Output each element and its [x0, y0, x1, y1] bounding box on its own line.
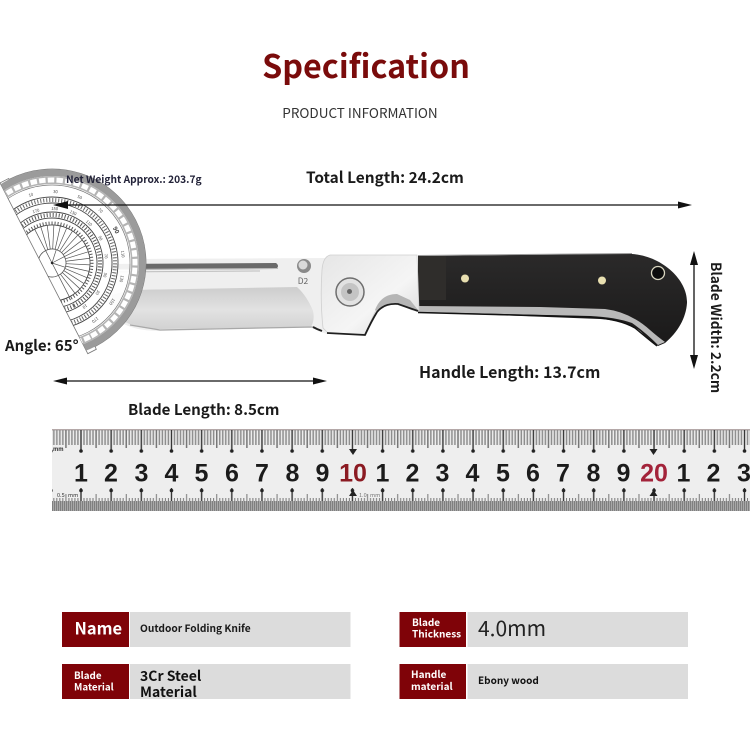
spec row: blade thickness — [400, 612, 688, 647]
ruler unit labels: mm — [68, 491, 78, 499]
ruler top ticks — [52, 430, 750, 454]
protractor numerals: 130 — [69, 209, 78, 218]
handle length label: Handle Length: 13.7cm — [419, 359, 600, 383]
title: Specification — [262, 42, 470, 88]
protractor numerals: 170 — [90, 315, 100, 324]
spec row: blade material: Blade — [74, 668, 102, 682]
ruler numbers: 9 — [316, 460, 329, 488]
blade pin and D2 mark: D2 — [298, 275, 309, 287]
subtitle: PRODUCT INFORMATION — [282, 102, 438, 122]
handle — [418, 254, 687, 346]
ruler numbers: 4 — [466, 460, 480, 488]
protractor centre point — [50, 261, 54, 265]
ruler numbers: 7 — [556, 460, 570, 488]
ruler unit labels: mm — [370, 491, 380, 499]
blade width label: Blade Width: 2.2cm — [707, 262, 727, 393]
spec row: name — [62, 612, 350, 647]
ruler unit labels: mm — [53, 445, 64, 453]
knife — [107, 254, 687, 346]
bolster — [321, 255, 419, 335]
spec row: handle material: Ebony wood — [478, 672, 539, 687]
ruler numbers: 3 — [436, 460, 449, 488]
ruler bottom ticks — [52, 488, 750, 511]
ruler numbers: 5 — [496, 460, 510, 488]
spec row: blade material: 3Cr Steel — [140, 666, 202, 686]
protractor numerals: 90 — [111, 225, 122, 235]
handle pins — [461, 274, 606, 284]
ruler numbers: 20 — [640, 460, 668, 488]
spec row: blade material: Material — [140, 682, 197, 702]
ruler body — [52, 429, 750, 511]
spec row: name: Name — [74, 616, 122, 640]
protractor numerals: 70 — [102, 254, 109, 260]
total length arrow — [53, 201, 692, 209]
ruler numbers: 1 — [74, 460, 88, 488]
protractor numerals: 110 — [84, 219, 94, 228]
ruler numbers: 2 — [707, 460, 720, 488]
spec row: blade thickness: 4.0mm — [478, 613, 546, 643]
ruler numbers: 6 — [225, 460, 239, 488]
spec row: handle material: Handle — [411, 666, 446, 681]
ruler numbers: 4 — [165, 460, 179, 488]
net weight label: Net Weight Approx.: 203.7g — [66, 171, 202, 186]
ruler numbers: 6 — [526, 460, 540, 488]
ruler numbers: 2 — [406, 460, 419, 488]
ruler unit labels — [53, 445, 380, 499]
blade pin and D2 mark — [297, 259, 311, 287]
protractor numerals: 90 — [96, 235, 104, 242]
ruler numbers: 3 — [135, 460, 148, 488]
spec row: name: Outdoor Folding Knife — [140, 620, 251, 635]
ruler numbers: 10 — [339, 460, 367, 488]
blade width arrow — [690, 251, 698, 369]
protractor numerals: 110 — [119, 250, 126, 259]
ruler numbers: 5 — [195, 460, 209, 488]
knife blade — [107, 258, 327, 334]
protractor numerals: 150 — [107, 297, 116, 307]
spec row: blade thickness: Blade — [412, 614, 440, 629]
protractor numerals: 50 — [101, 272, 108, 279]
spec row: handle material — [400, 664, 688, 699]
spade markers — [349, 449, 658, 496]
ruler numbers: 8 — [587, 460, 601, 488]
angle label: Angle: 65° — [4, 335, 79, 356]
protractor numerals: 50 — [76, 194, 83, 201]
ruler numbers: 9 — [617, 460, 630, 488]
protractor numerals: 10 — [80, 302, 88, 310]
ruler numbers: 1 — [376, 460, 390, 488]
ruler numbers: 2 — [104, 460, 118, 488]
ruler numbers: 1 — [677, 460, 691, 488]
ruler unit labels: 1.0 — [359, 491, 367, 499]
protractor numerals — [23, 163, 154, 326]
protractor numerals: 130 — [117, 275, 125, 283]
spec row: blade material: Material — [74, 680, 114, 694]
protractor numerals: 70 — [96, 207, 104, 215]
ruler numbers: 7 — [255, 460, 269, 488]
protractor — [0, 168, 146, 354]
protractor rings — [0, 169, 146, 350]
pivot screw — [336, 278, 364, 306]
total length label: Total Length: 24.2cm — [306, 166, 464, 188]
blade length arrow — [53, 378, 327, 384]
spec row: blade material — [62, 664, 350, 702]
spec row: blade thickness: Thickness — [412, 626, 461, 640]
spec row: handle material: material — [411, 678, 453, 693]
ruler — [52, 429, 750, 511]
protractor spokes — [35, 212, 103, 297]
protractor numerals: 10 — [28, 191, 35, 199]
ruler unit labels: 0.5 — [57, 491, 65, 499]
protractor numerals: 30 — [93, 289, 101, 296]
lanyard hole — [652, 266, 664, 280]
blade length label: Blade Length: 8.5cm — [128, 398, 279, 420]
ruler numbers: 8 — [286, 460, 300, 488]
ruler numbers — [74, 460, 750, 488]
protractor numerals: 150 — [51, 206, 59, 212]
protractor body — [0, 136, 180, 354]
protractor numerals: 30 — [53, 189, 59, 195]
protractor numerals: 170 — [32, 207, 41, 215]
